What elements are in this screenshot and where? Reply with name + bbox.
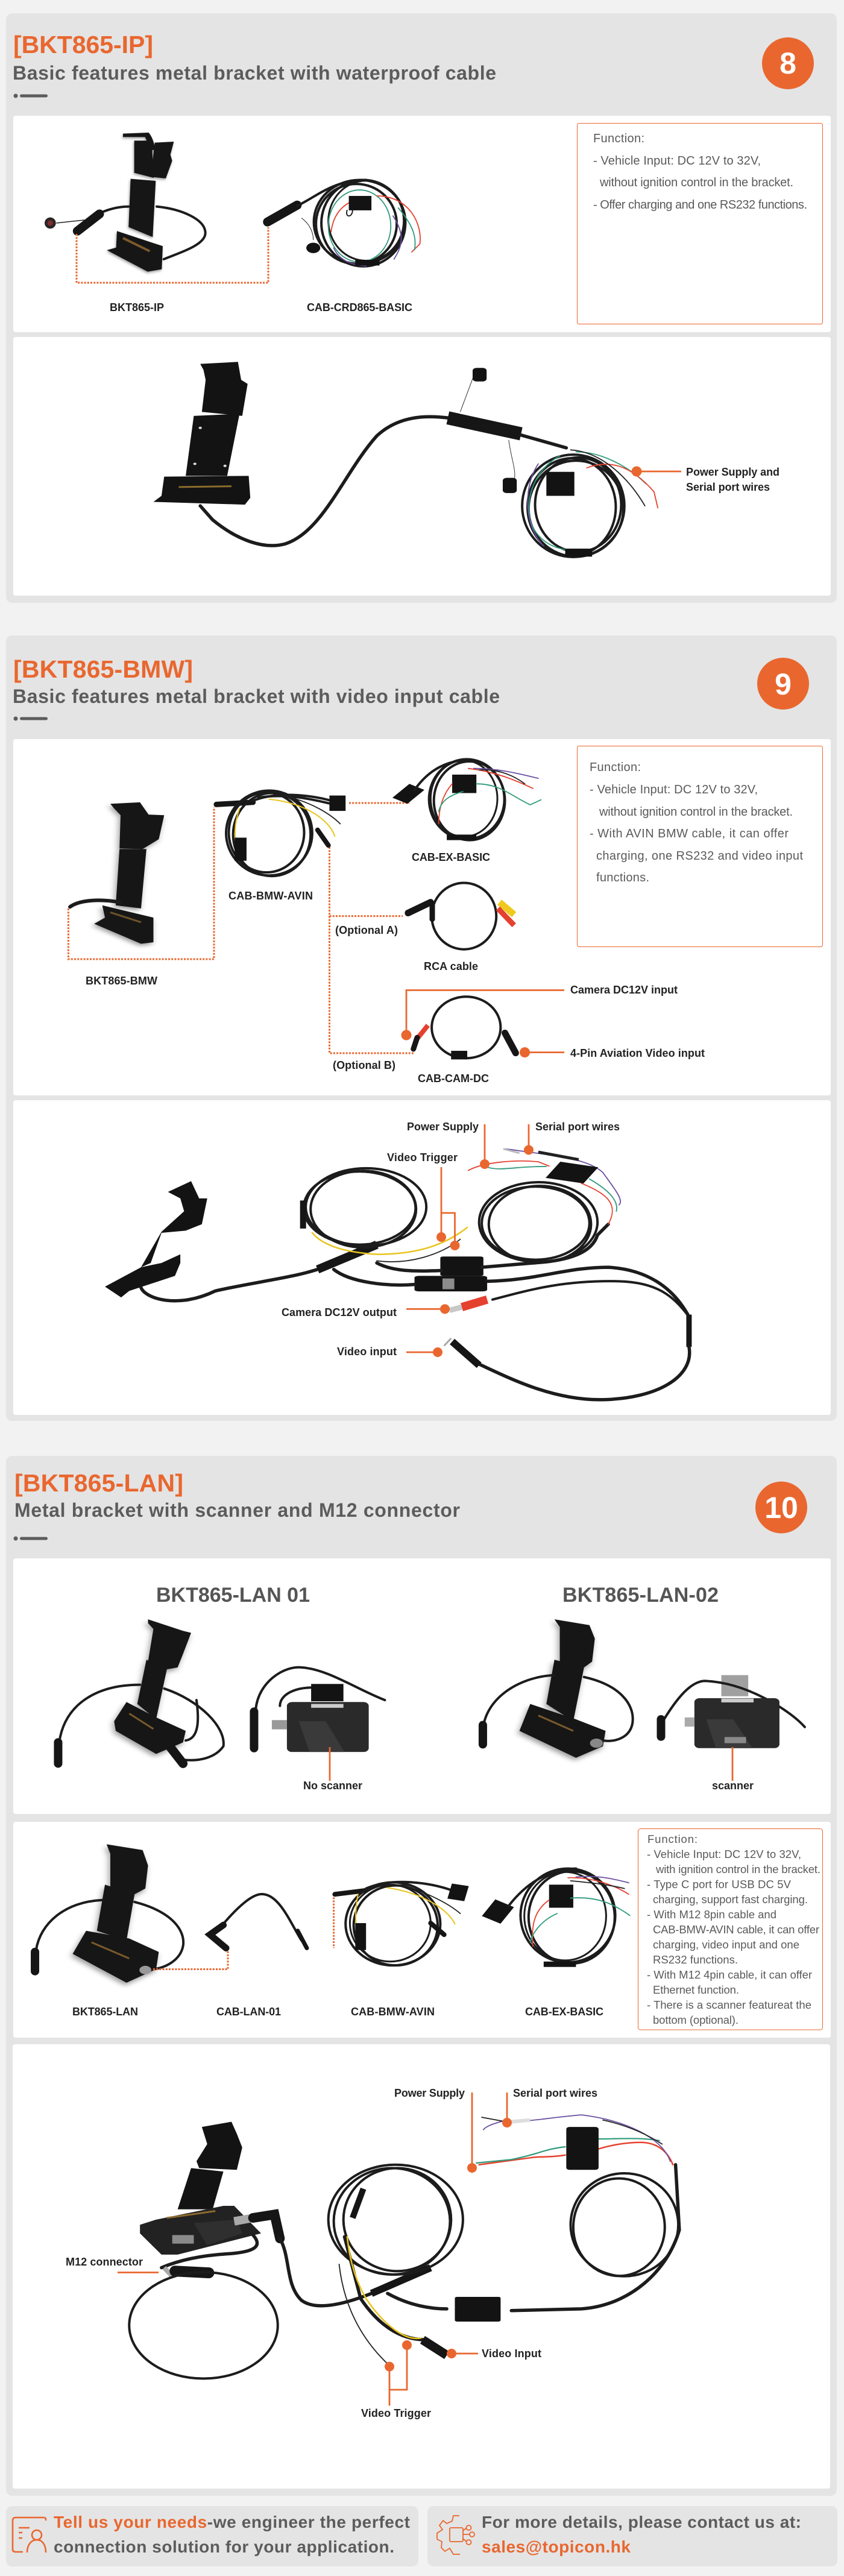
section 8 background panel bbox=[6, 13, 837, 603]
icon: person and document bbox=[13, 2518, 46, 2552]
labels: assembled view: Video input bbox=[337, 1346, 397, 1358]
labels: assembled view: Video Trigger bbox=[387, 1151, 458, 1164]
labels: assembled view: M12 connector bbox=[66, 2256, 143, 2268]
labels: assembled view: Power Supply bbox=[394, 2087, 465, 2099]
number badge 9 bbox=[757, 658, 809, 710]
callout: function list: - Type C port for USB DC 5V bbox=[647, 1878, 792, 1891]
number badge 10 bbox=[755, 1482, 807, 1534]
photo: CAB-CRD865-BASIC cable bbox=[268, 180, 420, 266]
section: BKT865-LAN bbox=[6, 1456, 837, 2496]
labels: parts: CAB-CAM-DC bbox=[418, 1072, 489, 1085]
label: BKT865-IP: BKT865-IP bbox=[110, 301, 164, 313]
labels: parts: CAB-BMW-AVIN bbox=[351, 2006, 435, 2018]
labels: assembled view: Power Supply bbox=[407, 1121, 479, 1133]
label: no scanner: No scanner bbox=[303, 1780, 362, 1792]
callout: function list: Function: bbox=[593, 132, 644, 145]
callout: function list: without ignition control in the bracket. bbox=[599, 805, 793, 819]
number badge 8 bbox=[762, 37, 814, 89]
heading: BKT865-LAN 01: BKT865-LAN 01 bbox=[156, 1584, 310, 1607]
panel: parts list bbox=[13, 1822, 831, 2038]
title: [BKT865-IP] bbox=[13, 31, 153, 58]
photo: BKT865-BMW bracket bbox=[70, 802, 164, 944]
number badge 10: 10 bbox=[764, 1491, 798, 1525]
callout: function list: Ethernet function. bbox=[653, 1983, 739, 1996]
photo: assembled bracket and cable bbox=[153, 362, 658, 557]
callout: function list: - Offer charging and one RS232 functions. bbox=[593, 198, 807, 212]
photo: CAB-LAN-01 bbox=[210, 1894, 307, 1948]
footer card: engineering message bbox=[6, 2506, 418, 2566]
photo: CAB-BMW-AVIN bbox=[216, 790, 345, 876]
labels: assembled view: Serial port wires bbox=[513, 2087, 597, 2099]
subtitle: Basic features metal bracket with video input cable bbox=[13, 685, 500, 707]
photo: scanner box without scanner bbox=[254, 1667, 385, 1752]
panel: assembled view bbox=[13, 1100, 831, 1415]
labels: assembled view: Video Trigger bbox=[361, 2407, 431, 2419]
callout: function list bbox=[578, 123, 822, 324]
labels: assembled view: Camera DC12V output bbox=[282, 1306, 397, 1318]
section 9 background panel bbox=[6, 635, 837, 1421]
labels: assembled view bbox=[282, 1121, 620, 1358]
labels: parts: CAB-EX-BASIC bbox=[525, 2006, 603, 2018]
callout: function list: - Vehicle Input: DC 12V to 32V, bbox=[593, 154, 761, 168]
labels: assembled view: Video Input bbox=[482, 2348, 541, 2360]
photo: CAB-BMW-AVIN bbox=[335, 1882, 469, 1965]
footer card: contact bbox=[427, 2506, 837, 2566]
label: power supply and serial port wires: Power Supply and bbox=[686, 466, 779, 478]
callout pointers: power supply, serial, trigger bbox=[406, 1124, 534, 1357]
callout: function list bbox=[578, 746, 822, 946]
heading accent bbox=[13, 94, 48, 98]
callout: function list: charging, one RS232 and video input bbox=[596, 849, 803, 863]
panel: parts list bbox=[13, 116, 831, 332]
footer text left: connection solution for your application. bbox=[54, 2537, 394, 2556]
footer text right bbox=[482, 2513, 801, 2556]
label: scanner: scanner bbox=[712, 1780, 754, 1792]
footer text right: sales@topicon.hk bbox=[482, 2537, 631, 2556]
pointer: no scanner bbox=[329, 1747, 330, 1781]
callout: function list: bottom (optional). bbox=[653, 2014, 738, 2026]
callout: function list: charging, support fast charging. bbox=[653, 1893, 808, 1906]
title: [BKT865-BMW] bbox=[13, 655, 193, 683]
callout: function list: - There is a scanner featureat the bbox=[647, 1998, 811, 2011]
callout: function list: - With M12 8pin cable and bbox=[647, 1908, 776, 1921]
labels: parts bbox=[72, 2006, 603, 2018]
labels: assembled view: Serial port wires bbox=[535, 1121, 620, 1133]
icon: gear with chip bbox=[437, 2516, 474, 2554]
callout: function list: - Vehicle Input: DC 12V to 32V, bbox=[590, 783, 758, 796]
labels: parts: (Optional A) bbox=[335, 924, 398, 936]
callout: function list bbox=[638, 1829, 822, 2030]
labels: parts: CAB-EX-BASIC bbox=[412, 851, 490, 863]
panel: assembled view bbox=[13, 337, 831, 596]
callout: function list: Function: bbox=[590, 761, 641, 774]
section: BKT865-IP bbox=[6, 13, 837, 603]
callout: function list: functions. bbox=[596, 871, 649, 884]
panel: assembled view bbox=[13, 2044, 830, 2489]
callout: function list: Function: bbox=[647, 1833, 698, 1845]
footer text left: Tell us your needs-we engineer the perfect bbox=[54, 2513, 410, 2531]
callout pointer: camera DC12V input bbox=[402, 984, 678, 1041]
panel: variants bbox=[13, 1558, 831, 1814]
connector dotted lines bbox=[68, 803, 414, 1053]
section: BKT865-BMW bbox=[6, 635, 837, 1421]
label: power supply and serial port wires bbox=[686, 466, 779, 493]
photo: CAB-CAM-DC bbox=[414, 997, 515, 1059]
callout: function list: RS232 functions. bbox=[653, 1953, 738, 1966]
heading: BKT865-LAN-02: BKT865-LAN-02 bbox=[562, 1584, 719, 1607]
photo: LAN 01 bracket bbox=[58, 1619, 224, 1763]
connector dotted line bbox=[77, 227, 268, 283]
callout: function list: charging, video input and one bbox=[653, 1938, 799, 1951]
photo: assembled BMW bracket and cables bbox=[105, 1149, 690, 1400]
callout: function list: without ignition control in the bracket. bbox=[599, 176, 793, 189]
title: [BKT865-LAN] bbox=[14, 1469, 183, 1497]
labels: parts: BKT865-LAN bbox=[72, 2006, 138, 2018]
labels: parts: CAB-LAN-01 bbox=[216, 2006, 281, 2018]
footer text left bbox=[54, 2513, 410, 2556]
photo: LAN 02 bracket bbox=[483, 1619, 633, 1758]
callout pointer: 4-pin aviation video input: 4-Pin Aviation Video input bbox=[570, 1047, 705, 1059]
labels: assembled view bbox=[66, 2087, 597, 2419]
photo: CAB-EX-BASIC bbox=[482, 1868, 630, 1967]
number badge 8: 8 bbox=[779, 46, 796, 80]
photo: BKT865-LAN bracket bbox=[35, 1844, 183, 1983]
photo: scanner box with scanner bbox=[660, 1675, 805, 1748]
callout pointers: assembled view bbox=[118, 2093, 512, 2405]
photo: BKT865-IP bracket bbox=[45, 133, 206, 272]
callout pointer: power supply bbox=[632, 467, 681, 476]
labels: parts: (Optional B) bbox=[333, 1059, 395, 1071]
panel: parts diagram bbox=[13, 739, 831, 1095]
labels: parts: BKT865-BMW bbox=[86, 975, 157, 987]
photo: CAB-EX-BASIC bbox=[392, 759, 541, 840]
heading accent bbox=[13, 1536, 48, 1541]
callout: function list: with ignition control in the bracket. bbox=[655, 1863, 820, 1875]
callout: function list: - With AVIN BMW cable, it can offer bbox=[590, 827, 789, 840]
callout: function list: - With M12 4pin cable, it can offer bbox=[647, 1968, 812, 1981]
section 10 background panel bbox=[6, 1456, 837, 2496]
labels: parts bbox=[86, 851, 490, 1085]
labels: parts: CAB-BMW-AVIN bbox=[228, 890, 313, 902]
subtitle: Basic features metal bracket with waterproof cable bbox=[13, 62, 496, 84]
heading accent bbox=[13, 716, 48, 721]
labels: parts: RCA cable bbox=[424, 960, 478, 972]
callout: function list: - Vehicle Input: DC 12V to 32V, bbox=[647, 1848, 801, 1860]
label: power supply and serial port wires: Serial port wires bbox=[686, 481, 770, 493]
photo: RCA cable bbox=[408, 883, 514, 949]
connector dotted lines bbox=[153, 1894, 334, 1969]
subtitle: Metal bracket with scanner and M12 connector bbox=[14, 1499, 460, 1521]
callout: function list: CAB-BMW-AVIN cable, it can offer bbox=[653, 1923, 819, 1936]
footer text right: For more details, please contact us at: bbox=[482, 2513, 801, 2531]
callout pointer: camera DC12V input: Camera DC12V input bbox=[570, 984, 678, 996]
photo: assembled LAN bracket and cables bbox=[129, 2115, 679, 2379]
number badge 9: 9 bbox=[775, 667, 792, 701]
label: CAB-CRD865-BASIC: CAB-CRD865-BASIC bbox=[307, 301, 412, 313]
pointer: scanner bbox=[732, 1747, 733, 1781]
